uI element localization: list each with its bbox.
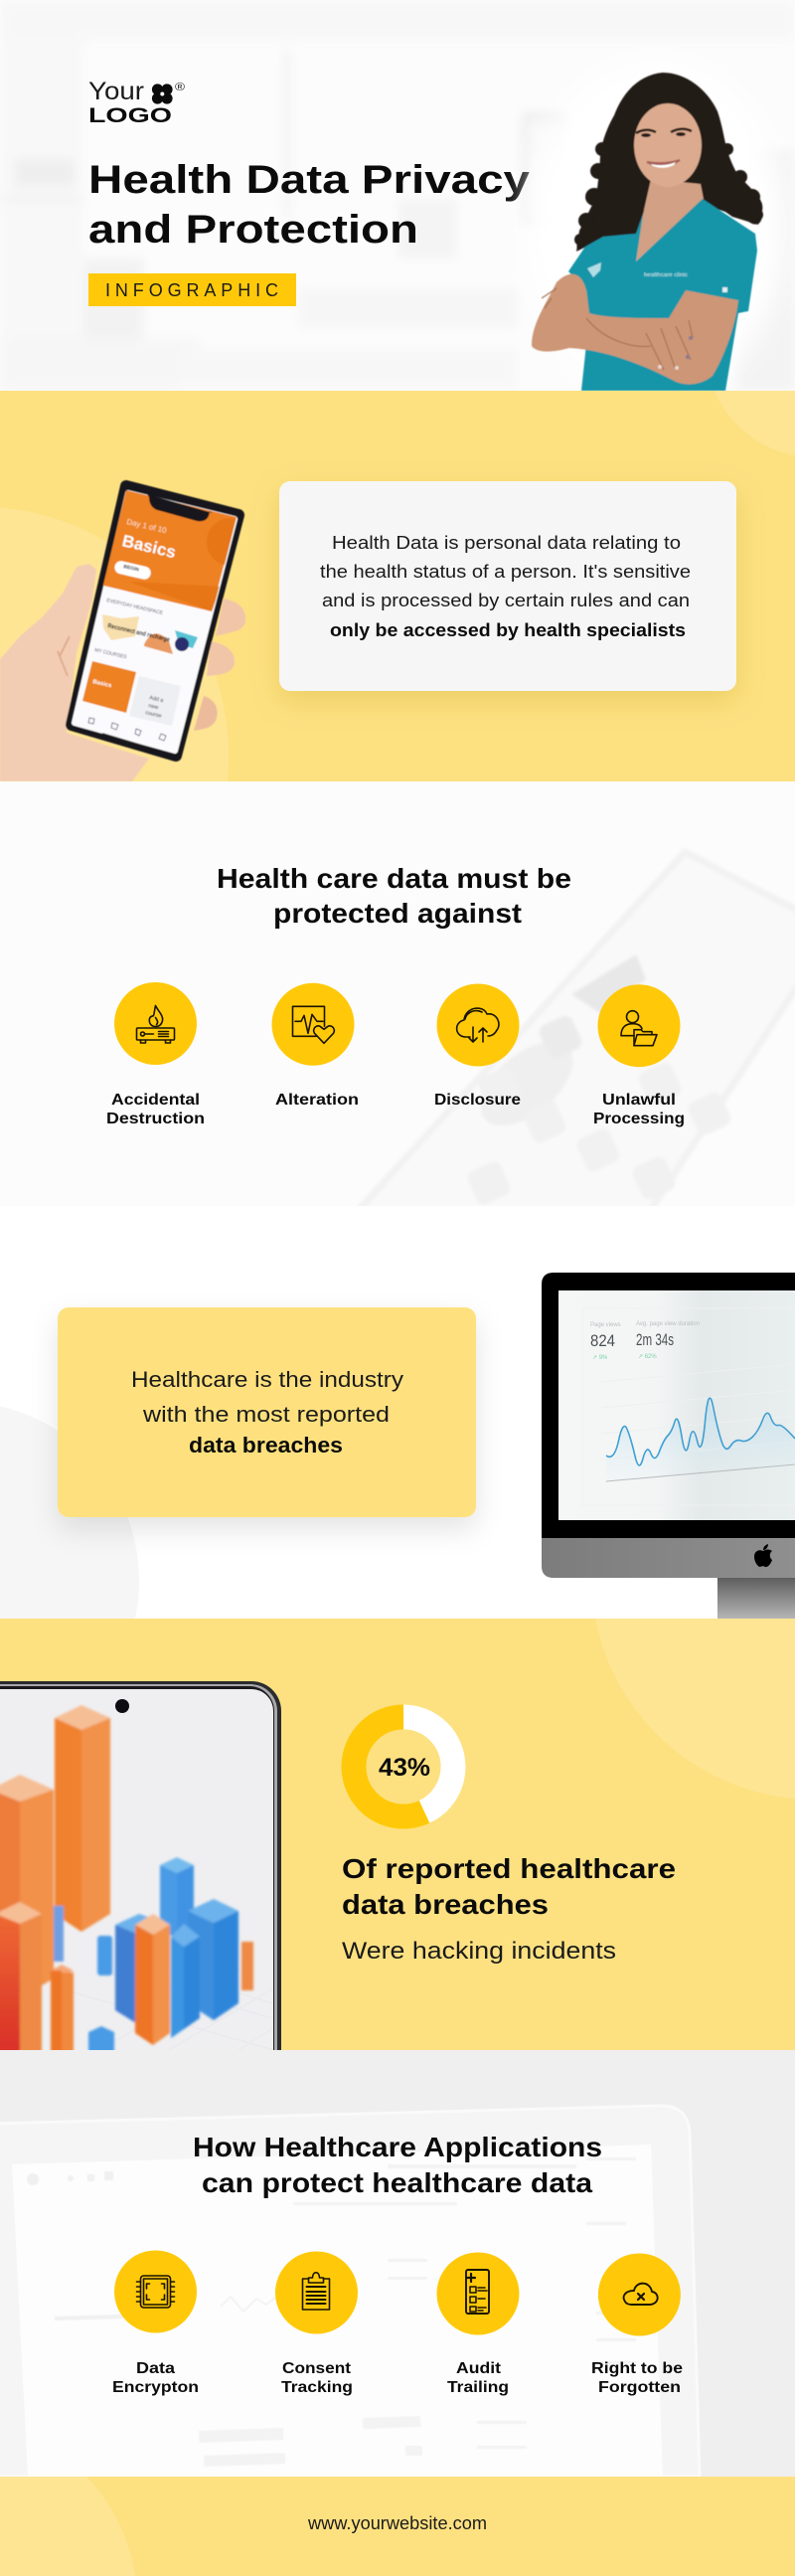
- 3D bars: [0, 1705, 253, 2058]
- card: definition text: the health status of a person. It's sensitive: [320, 561, 691, 582]
- heading: statistic caption: [342, 1853, 676, 1920]
- item: unlawful processing: [593, 984, 685, 1127]
- icon: clipboard: [302, 2273, 330, 2310]
- panel: how applications protect data: [0, 2050, 795, 2477]
- app card: reconnect: [102, 614, 198, 654]
- icon: checklist: [466, 2270, 489, 2314]
- monitor screen: [558, 1290, 795, 1520]
- panel: definition section: [0, 391, 795, 781]
- item: consent tracking: Consent: [282, 2360, 352, 2377]
- hero background: blurred clinic room: [14, 114, 787, 382]
- text: hacking incidents: Were hacking incidents: [342, 1938, 616, 1965]
- panel: most reported breaches: [0, 1273, 795, 1619]
- photo: healthcare professional: [527, 60, 785, 398]
- photo: hand holding phone: EVERYDAY HEADSPACE: [106, 598, 164, 616]
- neck and chest: [636, 179, 704, 261]
- photo: desktop monitor with analytics: ↗ 62%: [638, 1354, 657, 1360]
- title: Health Data Privacy: [88, 158, 531, 202]
- photo: healthcare professional: healthcare clinic: [644, 272, 689, 278]
- photo: desktop monitor with analytics: 2m 34s: [636, 1330, 674, 1349]
- heading: statistic caption: Of reported healthcare: [342, 1853, 676, 1884]
- background: faded smartphone: [360, 850, 795, 1206]
- photo: desktop monitor with analytics: Page views: [590, 1322, 621, 1328]
- icon: router with flame: [137, 1006, 175, 1043]
- heading: Health care data must be: [217, 863, 571, 894]
- item: data encryption: Data: [136, 2360, 175, 2377]
- card: industry text: data breaches: [189, 1433, 343, 1458]
- hand: [0, 564, 149, 781]
- photo: hand holding phone: Day 1 of 10: [126, 517, 168, 535]
- item: consent tracking: Tracking: [281, 2379, 353, 2396]
- card: definition text: and is processed by certain rules and can: [322, 590, 690, 610]
- item: data encryption: [112, 2251, 199, 2396]
- item: data encryption: Encrypton: [112, 2379, 199, 2396]
- panel: protected against: [107, 849, 795, 1206]
- photo: hand holding phone: BEGIN: [123, 564, 140, 574]
- card: industry text: Healthcare is the industry: [131, 1367, 404, 1392]
- heading: [217, 863, 571, 929]
- item: alteration: Alteration: [275, 1092, 359, 1109]
- heading: How Healthcare Applications: [193, 2132, 602, 2162]
- photo: hand holding phone: Basics: [92, 679, 112, 689]
- icon: logo flower: [152, 84, 173, 104]
- app orange header: [102, 489, 238, 612]
- crossed arms: [532, 274, 738, 384]
- item: disclosure: [434, 984, 521, 1109]
- panel: 43 percent statistic: [0, 1619, 795, 2050]
- logo: Your: [88, 78, 144, 105]
- heading: [193, 2132, 602, 2198]
- photo: hand holding phone: new: [148, 703, 159, 711]
- logo: [89, 82, 185, 122]
- face: [633, 102, 703, 187]
- card: definition text: only be accessed by health specialists: [330, 619, 686, 640]
- heading: protected against: [273, 898, 522, 929]
- notch: [147, 494, 213, 521]
- photo: hand holding phone: Add a: [149, 695, 165, 704]
- photo: hand holding phone: MY COURSES: [94, 647, 128, 661]
- item: unlawful processing: Processing: [593, 1111, 685, 1127]
- text: website: www.yourwebsite.com: [307, 2513, 487, 2533]
- camera: [115, 1699, 129, 1713]
- item: right to be forgotten: [591, 2253, 683, 2396]
- icon: chip: [137, 2276, 175, 2308]
- icon: cloud up and down: [457, 1008, 499, 1042]
- item: disclosure: Disclosure: [434, 1092, 521, 1109]
- badge: infographic: INFOGRAPHIC: [105, 280, 278, 300]
- card: industry text: with the most reported: [142, 1402, 390, 1427]
- item: right to be forgotten: Forgotten: [598, 2379, 681, 2396]
- title: and Protection: [88, 208, 418, 252]
- panel: hero header: [4, 72, 794, 391]
- logo: LOGO: [88, 104, 172, 127]
- title: [89, 164, 530, 243]
- photo: phone with 3D bar chart: [0, 1681, 281, 2050]
- photo: hand holding phone: course: [145, 710, 162, 720]
- card: industry text: [58, 1307, 476, 1517]
- icon: apple logo: [754, 1544, 772, 1567]
- hair back: [576, 73, 762, 251]
- icon: monitor with heart: [292, 1006, 334, 1043]
- phone body: [72, 486, 238, 756]
- background: faded laptop: [0, 2106, 700, 2477]
- phone screen: [0, 1689, 273, 2107]
- scrub top: [568, 199, 757, 391]
- photo: desktop monitor with analytics: [542, 1273, 795, 1619]
- card: definition text: Health Data is personal data relating to: [332, 532, 681, 553]
- badge: infographic: [88, 273, 296, 306]
- photo: desktop monitor with analytics: 824: [590, 1331, 615, 1350]
- panel: footer: [0, 2477, 795, 2576]
- photo: desktop monitor with analytics: ↗ 9%: [592, 1355, 608, 1361]
- item: accidental destruction: [106, 982, 205, 1127]
- photo: hand holding phone: Basics: [120, 531, 178, 562]
- phone screen: [75, 493, 235, 751]
- item: right to be forgotten: Right to be: [591, 2360, 683, 2377]
- photo: hand holding phone: [0, 486, 254, 781]
- heading: can protect healthcare data: [202, 2167, 592, 2198]
- donut chart: 43%: 43%: [379, 1754, 430, 1782]
- item: unlawful processing: Unlawful: [602, 1092, 676, 1109]
- item: audit trailing: Audit: [456, 2360, 502, 2377]
- icon: cloud with x: [624, 2284, 658, 2305]
- hair front locks: [574, 142, 763, 252]
- logo: ®: [175, 82, 185, 93]
- item: alteration: [272, 983, 359, 1109]
- app card: reconnect: Reconnect and recharge: [107, 622, 171, 643]
- card: definition text: [279, 481, 736, 691]
- item: consent tracking: [275, 2251, 358, 2396]
- item: audit trailing: [437, 2253, 519, 2396]
- donut chart: 43%: [354, 1717, 453, 1816]
- heading: statistic caption: data breaches: [342, 1889, 549, 1920]
- item: accidental destruction: Destruction: [106, 1111, 205, 1127]
- item: accidental destruction: Accidental: [111, 1092, 200, 1109]
- item: audit trailing: Trailing: [447, 2379, 509, 2396]
- photo: desktop monitor with analytics: Avg. page view duration: [636, 1321, 700, 1327]
- icon: person with folder: [621, 1011, 657, 1046]
